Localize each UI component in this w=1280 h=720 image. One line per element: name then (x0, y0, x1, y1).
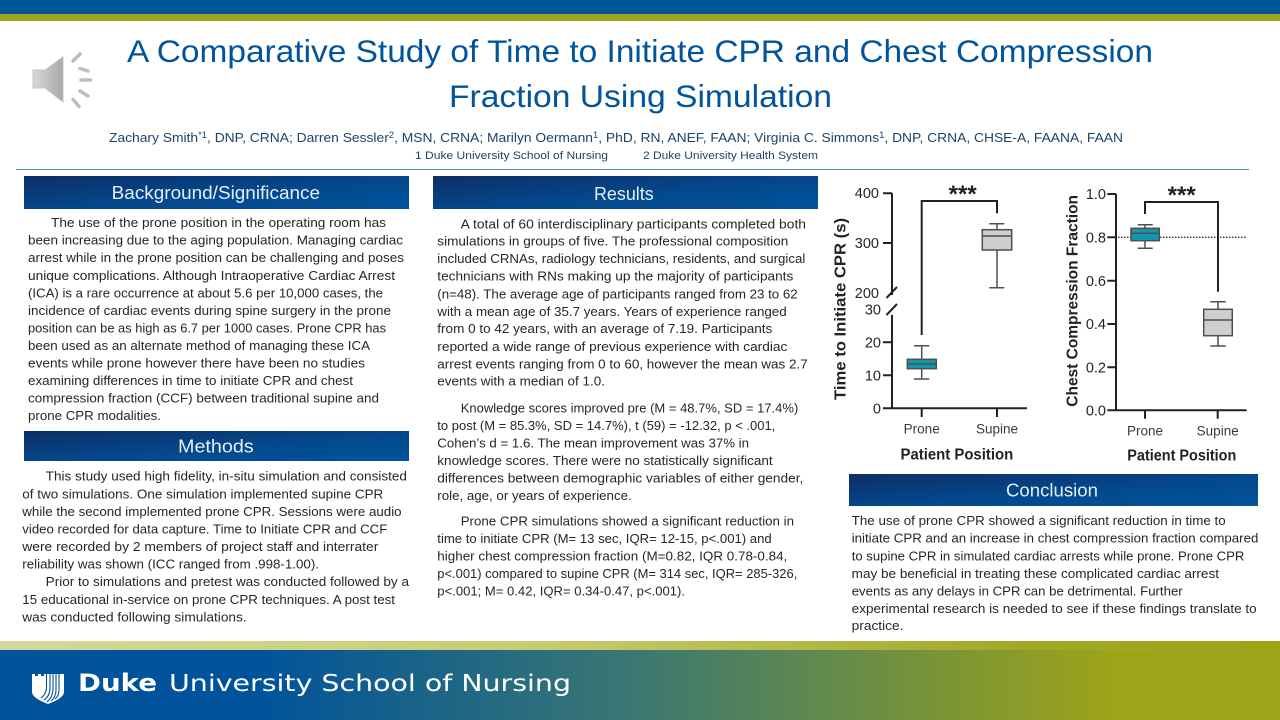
text block: background: (ICA) is a rare occurrence at about 5.6 per 10,000 cases, the (28, 285, 383, 300)
tick labels (1086, 187, 1106, 420)
authors: 1 (879, 130, 884, 140)
text block: results knowledge scores: knowledge scores. There were no statistically significant (437, 453, 773, 468)
text block: results participants: (n=48). The average age of participants ranged from 23 to 62 (437, 286, 798, 301)
tick labels: 20 (865, 336, 881, 352)
text block: conclusion: initiate CPR and an increase in chest compression fraction compared (852, 531, 1258, 546)
text block: results CPR simulations: p<.001; M= 0.42, IQR= 0.34-0.47, p<.001). (437, 584, 685, 599)
text block: results participants: included CRNAs, radiology technicians, residents, and surgical (437, 251, 805, 266)
heading: methods (24, 431, 409, 461)
authors: Zachary Smith (109, 130, 194, 145)
authors: , MSN, CRNA; Marilyn Oermann (394, 130, 593, 145)
text block: conclusion: experimental research is needed to see if these findings translate to (852, 601, 1257, 616)
text block: methods: 15 educational in-service on prone CPR techniques. A post test (22, 592, 395, 607)
text block: background: The use of the prone position in the operating room has (51, 215, 386, 230)
authors: , DNP, CRNA; Darren Sessler (207, 130, 389, 145)
x category labels: Supine (1197, 424, 1239, 438)
icon: audio speaker (33, 54, 90, 106)
panel: methods (21, 431, 410, 625)
text block: methods: Prior to simulations and pretest was conducted followed by a (46, 574, 410, 589)
x category labels (1127, 424, 1239, 438)
x axis title: Patient Position (1127, 448, 1236, 465)
heading: results (433, 176, 818, 209)
tick labels: 200 (855, 286, 879, 302)
title (127, 33, 1153, 114)
text block: conclusion: may be beneficial in treating these complicated cardiac arrest (852, 566, 1219, 581)
text block: results CPR simulations: time to initiate CPR (M= 13 sec, IQR= 12-15, p<.001) and (437, 531, 772, 546)
text block: methods: video recorded for data capture. Time to Initiate CPR and CCF (22, 522, 387, 537)
heading: results: Results (594, 184, 654, 204)
text block: background: unique complications. Although Intraoperative Cardiac Arrest (28, 268, 395, 283)
text block: results participants: with a mean age of 35.7 years. Years of experience ranged (436, 304, 787, 319)
authors: 1 (593, 130, 598, 140)
authors: 2 (389, 130, 394, 140)
text block: conclusion: to supine CPR in simulated cardiac arrests while prone. Prone CPR (852, 548, 1244, 563)
heading: conclusion (849, 474, 1258, 506)
y axis title: Chest Compression Fraction (1064, 195, 1081, 407)
heading: conclusion: Conclusion (1006, 481, 1098, 501)
text block: results knowledge scores: differences between demographic variables of either gender, (437, 471, 803, 486)
heading: methods: Methods (178, 436, 254, 456)
significance bracket (922, 181, 997, 335)
text block: results knowledge scores: to post (M = 85.3%, SD = 14.7%), t (59) = -12.32, p < .001, (437, 418, 775, 433)
text block: results participants: simulations in groups of five. The professional composition (437, 233, 788, 248)
footer wordmark: Duke (78, 669, 157, 697)
affiliations (415, 150, 818, 162)
tick labels: 1.0 (1086, 187, 1106, 203)
reference line at 0.8 (1118, 236, 1247, 238)
text block: results CPR simulations (437, 513, 797, 599)
text block: conclusion (852, 513, 1258, 633)
text block: methods: of two simulations. One simulation implemented supine CPR (22, 486, 383, 501)
text block: results participants: events with a median of 1.0. (437, 374, 605, 389)
y axis title: Time to Initiate CPR (s) (832, 218, 849, 400)
tick labels: 0.2 (1086, 360, 1106, 376)
text block: methods (21, 469, 410, 625)
text block: results participants: from 0 to 42 years, with an average of 7.19. Participants (437, 321, 773, 336)
authors: , DNP, CRNA, CHSE-A, FAANA, FAAN (884, 130, 1123, 145)
tick labels: 300 (855, 236, 879, 252)
text block: methods: reliability was shown (ICC ranged from .998-1.00). (22, 557, 319, 572)
footer band (0, 641, 1280, 720)
tick labels: 0.6 (1086, 274, 1106, 290)
box: prone (907, 346, 936, 379)
icon: Duke shield logo (32, 673, 64, 704)
text block: results knowledge scores (437, 401, 803, 503)
axes (883, 193, 1027, 417)
tick labels: 0.4 (1086, 317, 1106, 333)
box: prone (1131, 225, 1159, 248)
text block: background: position can be as high as 6.7 per 1000 cases. Prone CPR has (28, 320, 386, 336)
x category labels: Prone (1127, 424, 1163, 438)
box: supine (1204, 302, 1232, 346)
tick labels: 0.8 (1086, 230, 1106, 246)
text block: results CPR simulations: Prone CPR simulations showed a significant reduction in (461, 513, 794, 528)
text block: results participants: arrest events ranging from 0 to 60, however the mean was 2.7 (437, 356, 808, 371)
text block: background: arrest while in the prone position can be challenging and poses (28, 250, 404, 265)
x category labels (904, 422, 1018, 436)
x category labels: Supine (976, 422, 1018, 436)
x category labels: Prone (904, 422, 940, 436)
tick labels: 10 (865, 368, 881, 384)
tick labels: 0.0 (1086, 404, 1106, 420)
affiliations: 1 Duke University School of Nursing (415, 150, 608, 162)
text block: results participants (436, 216, 808, 389)
text block: results CPR simulations: higher chest compression fraction (M=0.82, IQR 0.78-0.84, (437, 548, 787, 563)
significance bracket: *** (949, 181, 977, 208)
text block: results participants: technicians with RNs making up the majority of participants (437, 269, 794, 284)
authors: *1 (198, 130, 207, 140)
text block: results knowledge scores: Knowledge scores improved pre (M = 48.7%, SD = 17.4%) (461, 401, 798, 416)
text block: background: prone CPR modalities. (28, 408, 161, 423)
text block: background: been increasing due to the aging population. Managing cardiac (28, 232, 403, 248)
text block: conclusion: events as any delays in CPR can be detrimental. Further (852, 583, 1183, 598)
text block: results participants: reported a wide range of previous experience with cardiac (437, 339, 788, 354)
text block: conclusion: The use of prone CPR showed a significant reduction in time to (852, 513, 1226, 528)
tick labels: 30 (865, 302, 881, 318)
authors: , PhD, RN, ANEF, FAAN; Virginia C. Simmons (598, 130, 880, 145)
tick labels: 0 (873, 402, 881, 418)
text block: methods: was conducted following simulations. (21, 610, 247, 625)
panel: background/significance (24, 176, 409, 423)
text block: background: incidence of cardiac events during spine surgery in the prone (28, 303, 391, 318)
tick labels (855, 186, 881, 418)
axes (1107, 194, 1247, 419)
tick labels: 400 (855, 186, 879, 202)
text block: background: compression fraction (CCF) between traditional supine and (28, 390, 379, 406)
title: A Comparative Study of Time to Initiate CPR and Chest Compression (127, 33, 1153, 69)
text block: methods: were recorded by 2 members of project staff and interrater (21, 539, 379, 554)
text block: background: examining differences in time to initiate CPR and chest (28, 373, 353, 388)
panel: results (433, 176, 818, 599)
panel: conclusion (849, 474, 1258, 633)
significance bracket (1145, 182, 1218, 292)
text block: background: events while prone however there have been no studies (28, 356, 365, 370)
text block: methods: while the second implemented prone CPR. Sessions were audio (21, 504, 402, 519)
chart: time to initiate CPR box plot (832, 181, 1027, 463)
text block: results knowledge scores: role, age, or years of experience. (437, 488, 632, 503)
affiliations: 2 Duke University Health System (643, 150, 818, 162)
text block: conclusion: practice. (852, 618, 903, 633)
footer wordmark (78, 669, 571, 697)
text block: results CPR simulations: p<.001) compared to supine CPR (M= 314 sec, IQR= 285-326, (437, 566, 797, 581)
chart: chest compression fraction box plot (1064, 182, 1247, 465)
significance bracket: *** (1168, 182, 1196, 209)
footer wordmark: University School of Nursing (169, 669, 571, 697)
text block: background: been used as an alternate method of managing these ICA (28, 338, 370, 353)
box: supine (982, 224, 1012, 288)
heading: background/significance: Background/Significance (112, 183, 320, 203)
text block: methods: This study used high fidelity, in-situ simulation and consisted (46, 469, 407, 484)
title: Fraction Using Simulation (449, 78, 832, 114)
top header bar (0, 0, 1280, 21)
text block: background (28, 215, 404, 423)
text block: results knowledge scores: Cohen’s d = 1.6. The mean improvement was 37% in (437, 435, 749, 450)
heading: background/significance (24, 176, 409, 209)
x axis title: Patient Position (900, 446, 1013, 463)
text block: results participants: A total of 60 interdisciplinary participants completed both (461, 216, 806, 231)
